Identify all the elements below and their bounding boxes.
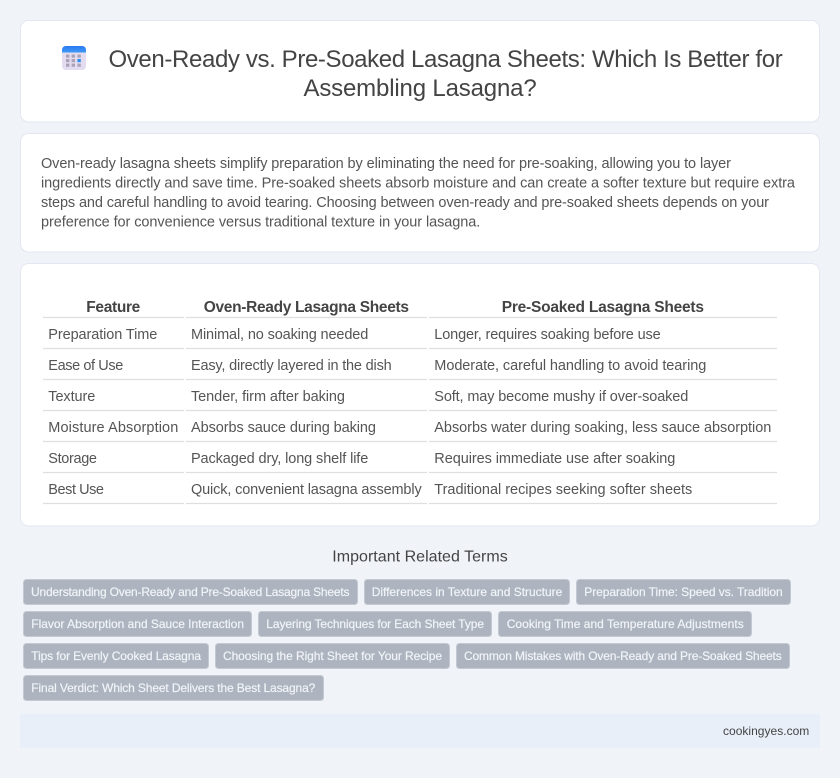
row: storage: Requires immediate use after soaking [434,451,675,467]
chip [364,580,570,604]
chip: Cooking Time and Temperature Adjustments [507,617,744,631]
row: texture: Tender, firm after baking [191,389,345,405]
title: Oven-Ready vs. Pre-Soaked Lasagna Sheets: Which Is Better for [108,46,783,73]
row: storage: Packaged dry, long shelf life [191,451,368,467]
row: preparation time [48,327,661,343]
row: best use: Quick, convenient lasagna assembly [191,482,422,498]
chip [216,644,450,668]
row: texture: Soft, may become mushy if over-soaked [434,389,688,405]
row: ease of use: Moderate, careful handling to avoid tearing [434,358,706,374]
row: storage [48,451,675,467]
related terms chips [24,580,790,700]
chip: Tips for Evenly Cooked Lasagna [31,649,201,663]
icon: calendar [62,46,86,70]
row: ease of use [48,358,706,374]
chip [24,580,358,604]
row: preparation time: Longer, requires soaking before use [434,327,661,343]
row: moisture absorption: Absorbs water during soaking, less sauce absorption [434,420,771,436]
row: ease of use: Easy, directly layered in the dish [191,358,392,374]
text block: description [41,156,796,230]
table header: Oven-Ready Lasagna Sheets [204,299,409,316]
chip [24,644,208,668]
chip [258,612,492,636]
chip [576,580,790,604]
chip: Layering Techniques for Each Sheet Type [266,617,484,631]
row: moisture absorption: Absorbs sauce during baking [191,420,376,436]
text block: description: steps and careful handling to avoid tearing. Choosing between oven-ready and pre-soaked sheets depends on your [41,195,769,211]
row: best use: Traditional recipes seeking softer sheets [434,482,692,498]
title: Assembling Lasagna? [304,75,537,102]
title [108,46,783,102]
row: texture [48,389,688,405]
row: best use [48,482,692,498]
text block: description: Oven-ready lasagna sheets simplify preparation by eliminating the need for pre-soaking, allowing you to layer [41,156,731,172]
table header [86,299,704,316]
panel: comparison table [20,264,820,526]
table header: Feature [86,299,141,316]
row: best use: Best Use [48,482,104,498]
table header: Pre-Soaked Lasagna Sheets [502,299,704,316]
row: preparation time: Minimal, no soaking needed [191,327,368,343]
panel: description [20,134,820,252]
chip: Understanding Oven-Ready and Pre-Soaked Lasagna Sheets [31,585,350,599]
footer source text: cookingyes.com [723,724,809,738]
text block: description: ingredients directly and save time. Pre-soaked sheets absorb moisture and can create a softer texture but require extra [41,176,796,192]
row: storage: Storage [48,451,97,467]
row: texture: Texture [48,389,95,405]
chip [24,676,324,700]
chip [456,644,790,668]
chip [498,612,752,636]
row: moisture absorption: Moisture Absorption [48,420,178,436]
chip: Final Verdict: Which Sheet Delivers the Best Lasagna? [31,681,316,695]
row: moisture absorption [48,420,771,436]
row: ease of use: Ease of Use [48,358,123,374]
text block: description: preference for convenience versus traditional texture in your lasagna. [41,214,480,230]
panel: header [20,20,820,122]
chip: Choosing the Right Sheet for Your Recipe [223,649,442,663]
chip: Common Mistakes with Oven-Ready and Pre-Soaked Sheets [464,649,782,663]
chip [24,612,252,636]
chip: Preparation Time: Speed vs. Tradition [584,585,783,599]
heading: important related terms: Important Related Terms [332,549,508,566]
footer [20,714,820,748]
chip: Differences in Texture and Structure [372,585,563,599]
row: preparation time: Preparation Time [48,327,157,343]
chip: Flavor Absorption and Sauce Interaction [31,617,244,631]
